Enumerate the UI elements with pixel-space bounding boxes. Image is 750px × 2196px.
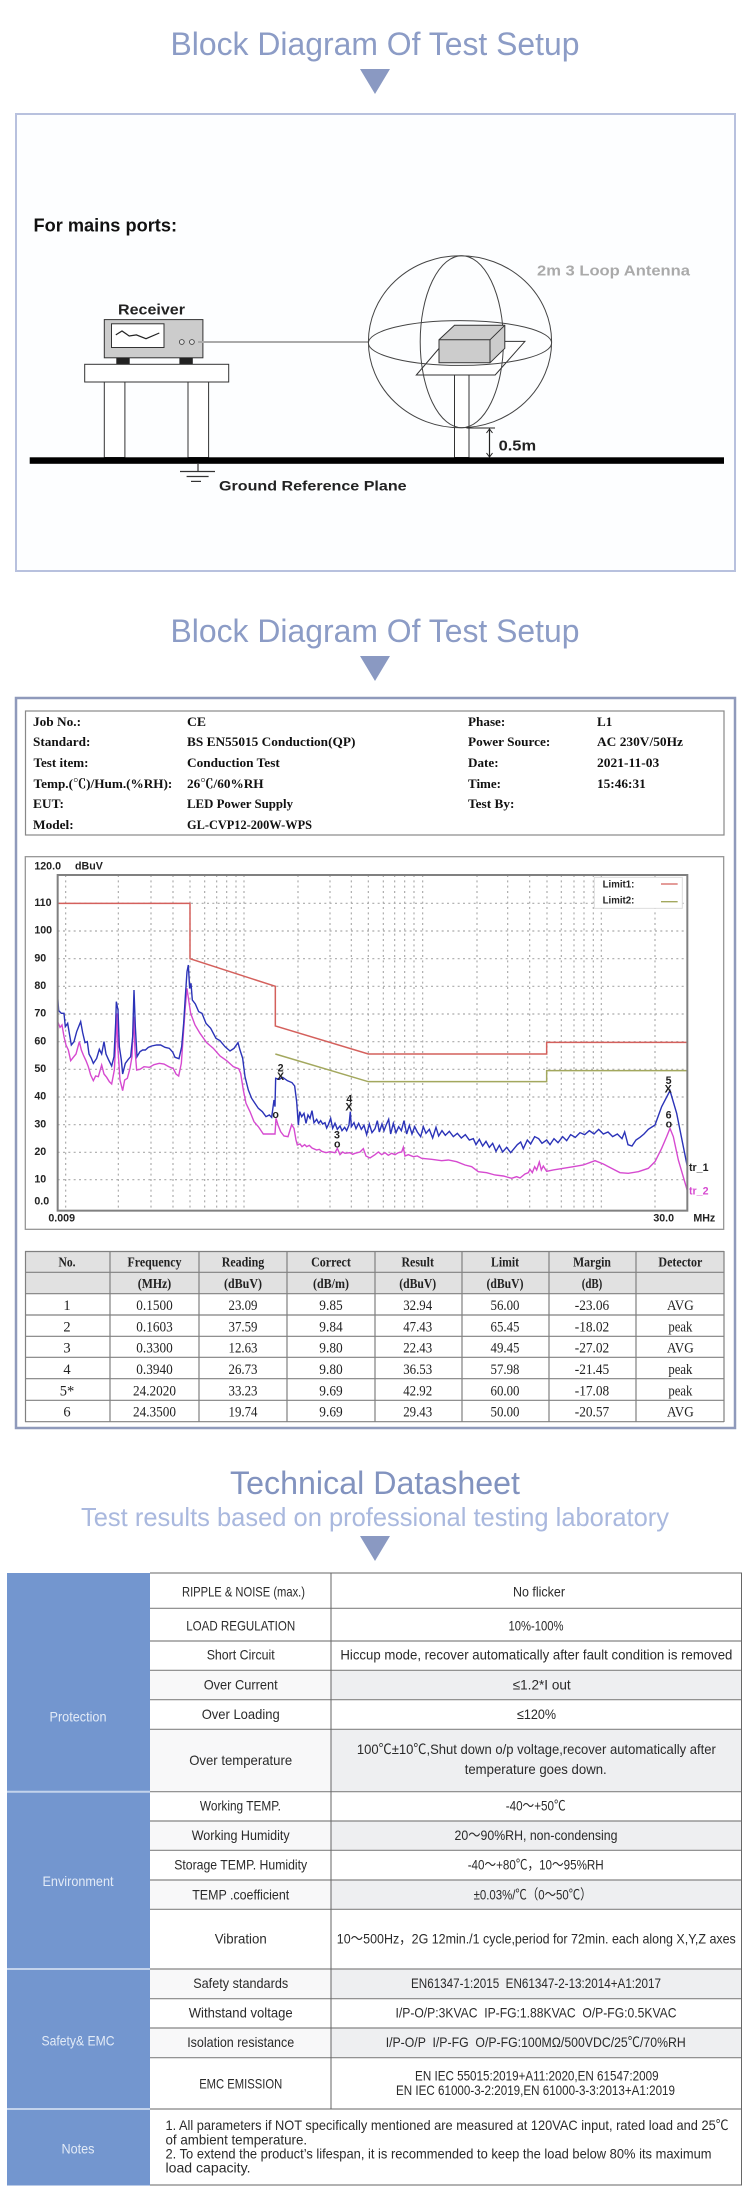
table: measurement results: (dBuV) xyxy=(399,1277,436,1292)
table: measurement results: Correct xyxy=(311,1256,351,1270)
safety and EMC rows: EN IEC 55015:2019+A11:2020,EN 61547:2009 xyxy=(415,2068,659,2084)
test info box: Time: xyxy=(468,776,501,791)
subheading: Test results based on professional testing laboratory xyxy=(81,1502,669,1532)
table: measurement results: 9.84 xyxy=(319,1319,343,1335)
table: measurement results: 5* xyxy=(60,1383,74,1399)
axis labels: 0.0 xyxy=(34,1195,49,1207)
table: measurement results: 9.69 xyxy=(319,1404,343,1420)
peak markers: 2 xyxy=(278,1063,284,1075)
axis labels: 100 xyxy=(34,925,52,937)
protection rows: temperature goes down. xyxy=(465,1761,607,1777)
height dimension 0.5m: 0.5m xyxy=(499,437,536,454)
category column: Environment xyxy=(42,1873,114,1889)
table: measurement results: No. xyxy=(58,1256,76,1270)
peak markers: 3 xyxy=(334,1129,340,1141)
peak markers: o xyxy=(272,1109,279,1121)
axis labels: 110 xyxy=(34,897,52,909)
table: measurement results: 65.45 xyxy=(490,1319,520,1335)
safety and EMC rows: Safety standards xyxy=(193,1975,288,1991)
environment rows: 20～90%RH, non-condensing xyxy=(454,1827,618,1843)
table: measurement results: 49.45 xyxy=(490,1341,520,1357)
test info box: 26℃/60%RH xyxy=(187,776,264,791)
axis labels: 80 xyxy=(34,980,46,992)
table: measurement results: 57.98 xyxy=(490,1362,520,1378)
table: measurement results: 47.43 xyxy=(403,1319,432,1335)
test info box: BS EN55015 Conduction(QP) xyxy=(187,734,355,749)
table: measurement results: 6 xyxy=(63,1404,71,1420)
axis labels: 0.009 xyxy=(48,1213,75,1225)
chart: conducted emission spectrum xyxy=(25,857,724,1229)
table: measurement results: 9.80 xyxy=(319,1341,343,1357)
receiver on table xyxy=(85,302,229,458)
heading: technical datasheet: Technical Datasheet xyxy=(230,1465,520,1501)
axis labels: 120.0 xyxy=(34,860,61,872)
test info box: Date: xyxy=(468,755,499,770)
test info box: 2021-11-03 xyxy=(597,755,660,770)
protection rows: 10%-100% xyxy=(508,1617,564,1633)
category column xyxy=(7,1573,150,2186)
test info box: L1 xyxy=(597,714,612,729)
safety and EMC rows: EMC EMISSION xyxy=(199,2076,282,2092)
receiver on table: Receiver xyxy=(118,302,185,319)
protection rows: ≤120% xyxy=(517,1706,556,1722)
table: measurement results: 32.94 xyxy=(403,1298,433,1314)
test info box: Job No.: xyxy=(33,714,81,729)
table: measurement results: (MHz) xyxy=(138,1277,172,1292)
test info box: 15:46:31 xyxy=(597,776,646,791)
heading: block diagram: Block Diagram Of Test Setup xyxy=(170,26,580,62)
safety and EMC rows: EN61347-1:2015 EN61347-2-13:2014+A1:2017 xyxy=(411,1975,661,1991)
table: measurement results: 33.23 xyxy=(228,1383,258,1399)
table: measurement results: -27.02 xyxy=(575,1341,609,1357)
test info box: Test item: xyxy=(34,755,88,770)
protection rows: ≤1.2*I out xyxy=(513,1676,571,1692)
table: measurement results: Detector xyxy=(658,1256,702,1270)
table: measurement results: peak xyxy=(668,1319,693,1335)
safety and EMC rows: I/P-O/P:3KVAC IP-FG:1.88KVAC O/P-FG:0.5KVAC xyxy=(396,2005,676,2021)
arrow: heading pointer 2 xyxy=(360,656,390,681)
axis labels: 70 xyxy=(34,1008,46,1020)
axis labels: 30 xyxy=(34,1118,46,1130)
table: measurement results: -23.06 xyxy=(575,1298,609,1314)
test info box: EUT: xyxy=(33,796,64,811)
trace tr_1 xyxy=(58,965,687,1167)
safety and EMC rows: EN IEC 61000-3-2:2019,EN 61000-3-3:2013+A1:2019 xyxy=(396,2082,675,2098)
panel: test setup diagram xyxy=(16,114,735,571)
category column: Protection xyxy=(50,1709,106,1725)
table: measurement results: 22.43 xyxy=(403,1341,432,1357)
limit 2 line xyxy=(275,1054,687,1082)
table: measurement results: 26.73 xyxy=(228,1362,258,1378)
table: measurement results: peak xyxy=(668,1383,693,1399)
trace tr_2 xyxy=(58,988,687,1191)
heading: block diagram 2: Block Diagram Of Test Setup xyxy=(170,613,580,649)
safety and EMC rows xyxy=(187,1975,686,2098)
table: measurement results: Reading xyxy=(222,1256,264,1270)
text: for mains ports: For mains ports: xyxy=(34,216,177,236)
table: measurement results: 19.74 xyxy=(228,1404,258,1420)
table: measurement results: -21.45 xyxy=(575,1362,609,1378)
axis labels: 60 xyxy=(34,1035,46,1047)
protection rows: RIPPLE & NOISE (max.) xyxy=(182,1584,305,1600)
axis labels: tr_2 xyxy=(689,1185,709,1197)
peak markers: 6 xyxy=(666,1109,672,1121)
axis labels xyxy=(34,860,715,1225)
axis labels: 90 xyxy=(34,952,46,964)
legend xyxy=(594,877,682,908)
environment rows: TEMP .coefficient xyxy=(192,1886,289,1902)
table: measurement results: 60.00 xyxy=(490,1383,520,1399)
table: measurement results: 0.1500 xyxy=(136,1298,173,1314)
table: measurement results xyxy=(25,1251,724,1422)
axis labels: 30.0 xyxy=(653,1213,674,1225)
table: measurement results: 56.00 xyxy=(490,1298,520,1314)
axis labels: tr_1 xyxy=(689,1162,709,1174)
text: ground reference plane: Ground Reference Plane xyxy=(219,478,407,494)
table: measurement results: 2 xyxy=(63,1319,71,1335)
table: measurement results: AVG xyxy=(667,1298,694,1314)
table: measurement results: -17.08 xyxy=(575,1383,609,1399)
table: measurement results: 50.00 xyxy=(490,1404,520,1420)
safety and EMC rows: Isolation resistance xyxy=(187,2034,294,2050)
text: antenna label: 2m 3 Loop Antenna xyxy=(537,262,691,280)
protection rows: Over Current xyxy=(204,1676,278,1692)
table: measurement results: 24.3500 xyxy=(133,1404,176,1420)
test info box: GL-CVP12-200W-WPS xyxy=(187,817,312,832)
panel: conduction test report xyxy=(16,698,735,1428)
peak markers: 4 xyxy=(346,1093,352,1105)
test info box: LED Power Supply xyxy=(187,796,293,811)
environment rows: ±0.03%/℃（0～50℃） xyxy=(474,1886,592,1902)
test info box: CE xyxy=(187,714,206,729)
loop antenna with device xyxy=(368,256,552,458)
table: measurement results: -18.02 xyxy=(575,1319,609,1335)
table: measurement results: 3 xyxy=(63,1341,71,1357)
table: measurement results: 36.53 xyxy=(403,1362,432,1378)
table: measurement results: Result xyxy=(401,1256,434,1270)
protection rows: 100℃±10℃,Shut down o/p voltage,recover automatically after xyxy=(357,1741,716,1757)
test info box xyxy=(26,711,724,835)
table: measurement results: 1 xyxy=(63,1298,71,1314)
arrow: heading pointer 3 xyxy=(360,1536,390,1561)
table: measurement results: Limit xyxy=(491,1256,519,1270)
environment rows: Working Humidity xyxy=(192,1827,290,1843)
plot frame xyxy=(58,875,687,1211)
axis labels: 50 xyxy=(34,1063,46,1075)
table: measurement results: 0.3300 xyxy=(136,1341,173,1357)
test info box: Power Source: xyxy=(468,734,550,749)
table: measurement results: 4 xyxy=(63,1362,71,1378)
table: measurement results: 9.69 xyxy=(319,1383,343,1399)
table: measurement results: 9.85 xyxy=(319,1298,343,1314)
protection rows: No flicker xyxy=(513,1584,565,1600)
environment rows: Storage TEMP. Humidity xyxy=(174,1857,307,1873)
peak markers: o xyxy=(666,1118,673,1130)
axis labels: MHz xyxy=(693,1213,715,1225)
table: measurement results: peak xyxy=(668,1362,693,1378)
table: measurement results: 29.43 xyxy=(403,1404,432,1420)
table: measurement results: (dBuV) xyxy=(224,1277,262,1292)
axis labels: dBuV xyxy=(75,860,104,872)
safety and EMC rows: Withstand voltage xyxy=(189,2005,293,2021)
environment rows xyxy=(174,1798,736,1947)
notes text: 2. To extend the product’s lifespan, it is recommended to keep the load below 80% its maximum xyxy=(166,2145,712,2161)
axis labels: 20 xyxy=(34,1146,46,1158)
test info box: AC 230V/50Hz xyxy=(597,734,683,749)
environment rows: Working TEMP. xyxy=(200,1798,281,1814)
table: measurement results: (dB/m) xyxy=(313,1277,349,1292)
safety and EMC rows: I/P-O/P I/P-FG O/P-FG:100MΩ/500VDC/25℃/70%RH xyxy=(386,2034,686,2050)
table: measurement results: AVG xyxy=(667,1404,694,1420)
ground symbol xyxy=(180,464,215,481)
test info box: Standard: xyxy=(33,734,90,749)
test info box: Phase: xyxy=(468,714,505,729)
height dimension 0.5m xyxy=(466,428,536,457)
test info box: Test By: xyxy=(468,796,514,811)
table: measurement results: 37.59 xyxy=(228,1319,258,1335)
table: measurement results: 42.92 xyxy=(403,1383,432,1399)
cable xyxy=(198,341,368,343)
table: measurement results: (dBuV) xyxy=(486,1277,524,1292)
axis labels: 10 xyxy=(34,1174,46,1186)
table: measurement results: (dB) xyxy=(582,1277,603,1292)
test info box: Model: xyxy=(33,817,74,832)
protection rows xyxy=(182,1584,732,1777)
notes text: load capacity. xyxy=(166,2160,250,2176)
protection rows: Over temperature xyxy=(189,1752,292,1768)
notes text: of ambient temperature. xyxy=(166,2131,307,2147)
environment rows: -40～+50℃ xyxy=(506,1798,566,1814)
peak markers: o xyxy=(334,1138,341,1150)
peak markers xyxy=(272,1063,673,1150)
table: measurement results: 23.09 xyxy=(228,1298,258,1314)
table: measurement results: 9.80 xyxy=(319,1362,343,1378)
limit 1 line xyxy=(58,903,687,1054)
peak markers: X xyxy=(665,1084,673,1096)
table: measurement results: 0.1603 xyxy=(136,1319,173,1335)
legend: Limit1: xyxy=(603,879,634,890)
table: measurement results: AVG xyxy=(667,1341,694,1357)
environment rows: -40～+80℃，10～95%RH xyxy=(468,1857,604,1873)
shaded rows xyxy=(150,1670,742,2058)
test info box: Temp.(℃)/Hum.(%RH): xyxy=(34,776,172,791)
arrow: heading pointer 1 xyxy=(360,69,390,94)
legend: Limit2: xyxy=(603,896,634,907)
protection rows: Hiccup mode, recover automatically after fault condition is removed xyxy=(340,1647,732,1663)
table: measurement results: 24.2020 xyxy=(133,1383,176,1399)
table: technical specifications xyxy=(7,1573,742,2186)
protection rows: Short Circuit xyxy=(207,1647,275,1663)
test info box: Conduction Test xyxy=(187,755,280,770)
environment rows: Vibration xyxy=(215,1931,267,1947)
table: measurement results: Frequency xyxy=(128,1256,182,1270)
protection rows: Over Loading xyxy=(202,1706,280,1722)
table: measurement results: Margin xyxy=(573,1256,611,1270)
notes text xyxy=(166,2117,728,2176)
table: measurement results: 12.63 xyxy=(228,1341,258,1357)
category column: Notes xyxy=(62,2140,94,2156)
table: measurement results: -20.57 xyxy=(575,1404,609,1420)
axis labels: 40 xyxy=(34,1091,46,1103)
category column: Safety& EMC xyxy=(42,2032,114,2048)
peak markers: 5 xyxy=(666,1075,672,1087)
table: measurement results: 0.3940 xyxy=(136,1362,173,1378)
peak markers: X xyxy=(277,1071,285,1083)
ground plane xyxy=(30,457,724,464)
protection rows: LOAD REGULATION xyxy=(186,1617,295,1633)
peak markers: X xyxy=(345,1102,353,1114)
